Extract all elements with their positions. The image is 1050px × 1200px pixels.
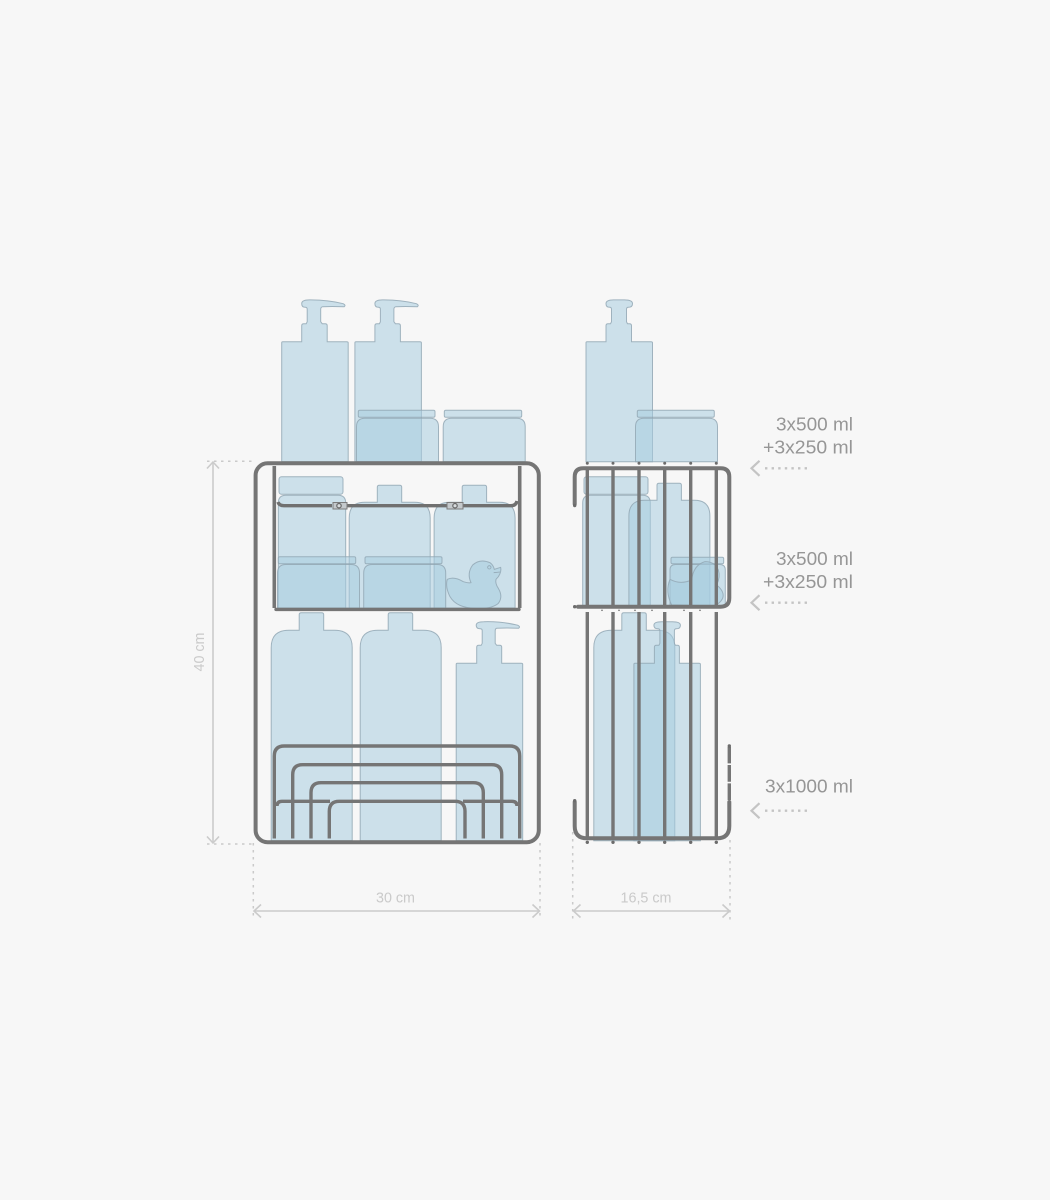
capacity label middle xyxy=(763,548,853,592)
side small jar xyxy=(670,557,725,606)
lower basket profile xyxy=(575,802,729,838)
side rubber duck xyxy=(668,562,723,606)
side tall jar upper shelf xyxy=(583,477,650,606)
outer frame xyxy=(256,463,539,842)
lower wire arch 2 xyxy=(293,765,502,838)
side jar top xyxy=(636,410,718,462)
jar top middle xyxy=(356,410,438,462)
label 40 cm: 40 cm xyxy=(192,632,208,672)
dimension: width 30 cm xyxy=(253,843,540,920)
capacity label top xyxy=(763,414,853,458)
rubber duck xyxy=(447,561,501,608)
pump bottle lower right xyxy=(456,622,523,841)
side pump bottle top xyxy=(586,300,652,462)
side view: containers xyxy=(583,300,725,841)
medium bottle upper shelf center xyxy=(349,485,430,608)
label 16,5 cm: 16,5 cm xyxy=(620,890,672,906)
arrow bottom xyxy=(752,803,807,818)
rear clipped rail xyxy=(728,747,731,800)
jar top right xyxy=(443,410,525,462)
upper shelf profile xyxy=(575,468,729,607)
side large bottle xyxy=(594,613,675,841)
large bottle left xyxy=(271,613,352,841)
arrow top xyxy=(752,461,807,476)
pump bottle top left xyxy=(282,300,348,462)
capacity label bottom: 3x1000 ml xyxy=(765,776,853,796)
capacity label middle: +3x250 ml xyxy=(763,571,853,592)
tall jar upper shelf xyxy=(278,477,346,608)
dimension: depth 16,5 cm xyxy=(573,832,730,920)
capacity label top: +3x250 ml xyxy=(763,436,853,458)
side view: wire frame xyxy=(573,462,731,844)
lower wire arch 3 xyxy=(311,783,483,838)
upper rail with clips xyxy=(278,501,517,509)
upper vertical bars xyxy=(587,470,716,605)
lower vertical bars xyxy=(587,612,716,840)
side pump bottle lower xyxy=(634,622,700,841)
jar upper shelf center xyxy=(364,557,446,608)
upper shelf bar xyxy=(276,608,519,611)
pump bottle top middle xyxy=(355,300,421,462)
capacity label top: 3x500 ml xyxy=(776,414,853,434)
front view: containers xyxy=(271,300,525,841)
medium bottle upper shelf right xyxy=(434,485,515,608)
lower wire arch 4 xyxy=(329,801,465,838)
low rail xyxy=(277,801,517,806)
jar upper shelf left xyxy=(278,557,360,608)
dimension: height 40 cm xyxy=(192,461,255,844)
capacity label middle: 3x500 ml xyxy=(776,548,853,569)
front view: wire frame xyxy=(256,463,539,842)
wire end dots xyxy=(573,462,731,844)
lower wire arch 1 xyxy=(274,746,520,838)
large bottle center xyxy=(360,613,441,841)
arrow middle xyxy=(752,595,807,610)
label 30 cm: 30 cm xyxy=(376,890,415,906)
side medium bottle upper shelf xyxy=(629,483,710,606)
upper inner verticals xyxy=(274,466,520,608)
